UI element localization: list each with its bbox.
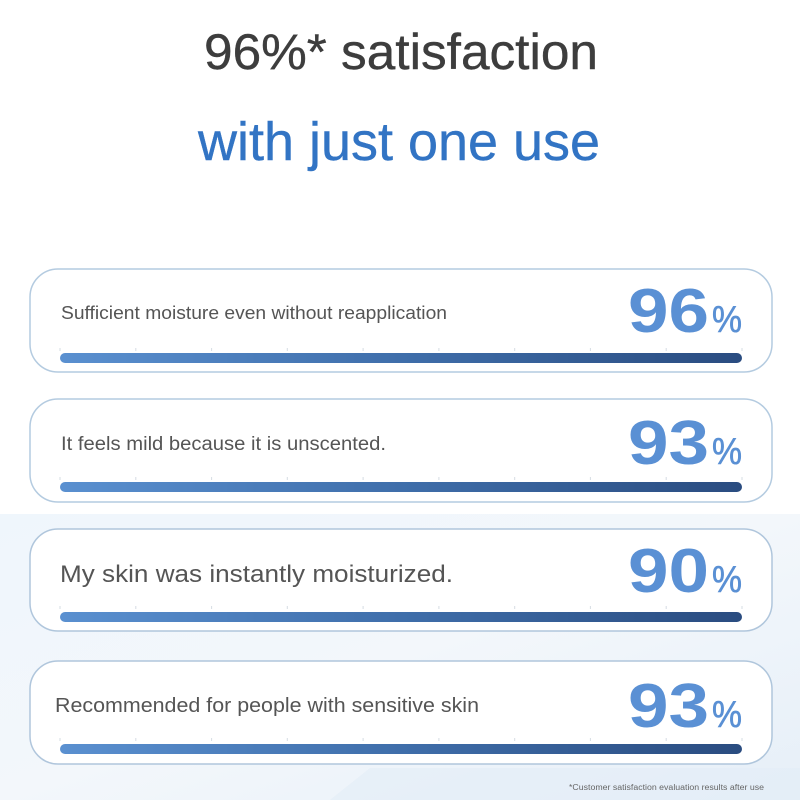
value: 93% xyxy=(628,409,742,478)
statement: mild: It feels mild because it is unscented. xyxy=(61,434,386,455)
statement: sufficient moisture: Sufficient moisture even without reapplication xyxy=(61,303,447,323)
scale ticks xyxy=(60,606,742,609)
value: 96%: 96 xyxy=(628,277,709,346)
value: 93% xyxy=(628,672,742,741)
progress bar xyxy=(60,612,742,622)
panel: sufficient moisture 96% xyxy=(30,269,772,372)
panel: mild unscented 93% xyxy=(30,399,772,502)
value: 93%: % xyxy=(712,431,742,472)
value: 90%: 90 xyxy=(628,537,709,606)
value: 96% xyxy=(628,277,742,346)
title line: satisfaction: 96%* satisfaction xyxy=(204,24,598,80)
panel: instantly moisturized 90% xyxy=(30,529,772,631)
value: 93%: 93 xyxy=(628,672,709,741)
value: 96%: % xyxy=(712,299,742,340)
value: 93%: % xyxy=(712,694,742,735)
footnote: *Customer satisfaction evaluation results after use xyxy=(569,783,765,792)
scale ticks xyxy=(60,477,742,480)
scale ticks xyxy=(60,348,742,351)
value: 93%: 93 xyxy=(628,409,709,478)
statement: instantly moisturized: My skin was instantly moisturized. xyxy=(60,561,453,588)
progress bar xyxy=(60,482,742,492)
progress bar xyxy=(60,744,742,754)
value: 90% xyxy=(628,537,742,606)
panel: sensitive skin 93% xyxy=(30,661,772,764)
title line: with just one use: with just one use xyxy=(197,112,600,172)
scale ticks xyxy=(60,738,742,741)
statement: sensitive skin: Recommended for people with sensitive skin xyxy=(55,695,479,717)
value: 90%: % xyxy=(712,559,742,600)
progress bar xyxy=(60,353,742,363)
